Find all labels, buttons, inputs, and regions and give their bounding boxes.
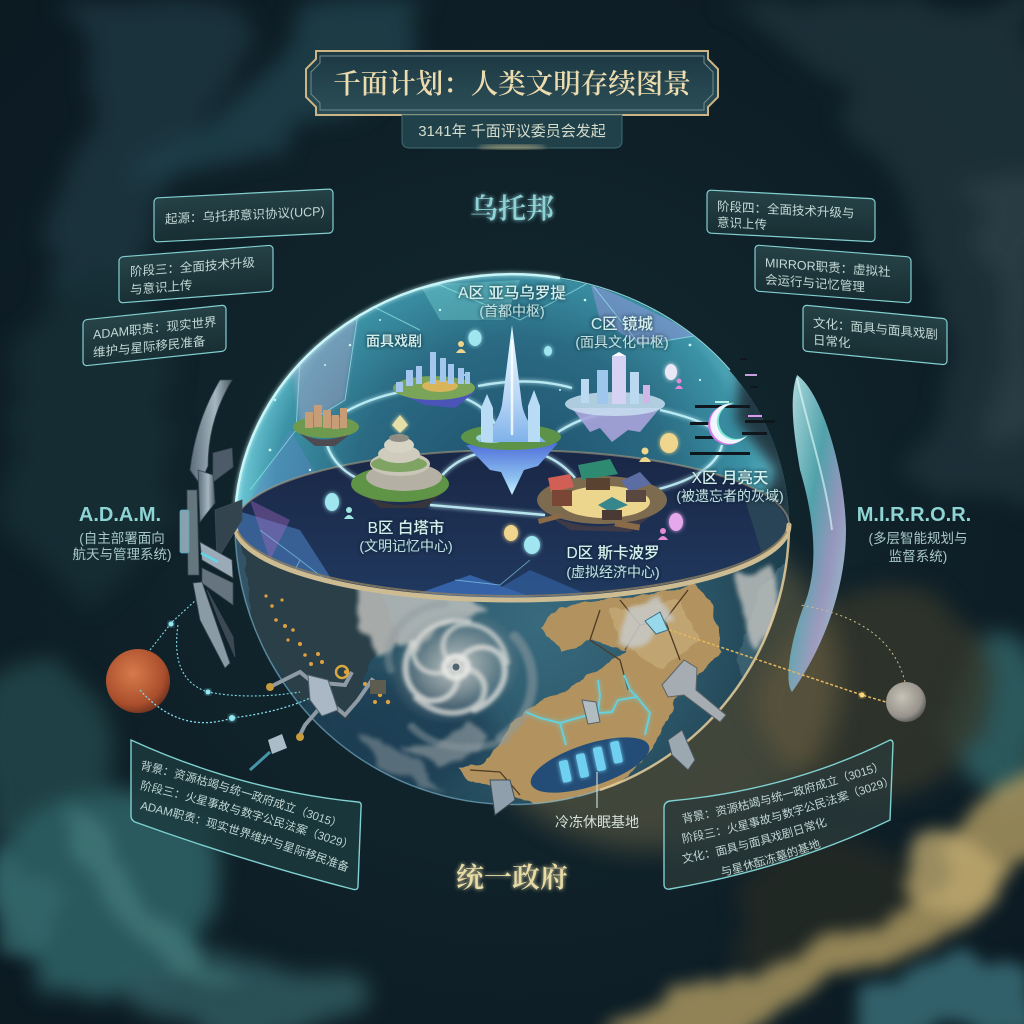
orbits and beams bbox=[140, 600, 905, 723]
mech: surface cannons bbox=[490, 612, 726, 815]
panel: phase three: 阶段三：全面技术升级 bbox=[130, 255, 255, 279]
island: central spire A bbox=[461, 325, 561, 495]
continent: cracked desert bbox=[460, 560, 789, 806]
panel: MIRROR duty bbox=[755, 245, 911, 303]
panel: MIRROR duty: MIRROR职责：虚拟社 bbox=[765, 255, 891, 279]
panel: phase four: 意识上传 bbox=[717, 215, 767, 232]
planet: Moon bbox=[886, 682, 926, 722]
label: zone C bbox=[575, 314, 669, 350]
label: zone A: (首都中枢) bbox=[479, 303, 545, 319]
network links bbox=[327, 381, 722, 515]
device: M.I.R.R.O.R. blade bbox=[788, 375, 846, 692]
panel: ADAM duty: ADAM职责：现实世界 bbox=[93, 315, 217, 342]
panel: MIRROR duty: 会运行与记忆管理 bbox=[765, 272, 865, 294]
label: zone X: (被遗忘者的灰域) bbox=[676, 488, 784, 504]
subtitle text: 3141年 千面评议委员会发起 bbox=[418, 123, 606, 140]
title text: 千面计划：人类文明存续图景 bbox=[333, 61, 691, 101]
rim: brass ring bbox=[235, 450, 789, 600]
label: M.I.R.R.O.R. bbox=[857, 504, 971, 564]
dark landmass upper left bbox=[240, 530, 400, 720]
label: zone C: C区 镜城 bbox=[591, 314, 653, 333]
floor: navy disc bbox=[235, 450, 789, 600]
island: D market bbox=[537, 459, 667, 532]
label: zone B: (文明记忆中心) bbox=[359, 538, 453, 554]
panel: lower right curved: 背景：资源枯竭与统一政府成立（3015） bbox=[682, 762, 876, 824]
cyan network bbox=[526, 675, 650, 745]
label: zone B: B区 白塔市 bbox=[368, 518, 444, 537]
clouds: white bands bbox=[355, 565, 782, 790]
planet: Mars bbox=[106, 649, 170, 713]
label: M.I.R.R.O.R.: (多层智能规划与 bbox=[868, 530, 968, 546]
island: C mirror city bbox=[565, 352, 665, 442]
panel: lower right curved: 阶段三：火星事故与数字公民法案（3029） bbox=[682, 777, 887, 844]
panel: phase four: 阶段四：全面技术升级与 bbox=[717, 199, 854, 221]
title plaque bbox=[306, 51, 718, 115]
label: A.D.A.M. bbox=[72, 504, 172, 562]
hurricane bbox=[383, 602, 539, 752]
panel: culture: 文化：面具与面具戏剧 bbox=[813, 316, 938, 342]
label: zone B bbox=[359, 518, 453, 554]
panel: lower left curved: ADAM职责：现实世界维护与星际移民准备 bbox=[140, 802, 348, 872]
panel: lower left curved: 阶段三：火星事故与数字公民法案（3029） bbox=[140, 780, 346, 848]
cryo pods recess bbox=[530, 737, 650, 793]
subtitle plaque bbox=[402, 115, 622, 149]
panel: phase four bbox=[707, 190, 875, 242]
label: mask drama: 面具戏剧 bbox=[366, 333, 422, 349]
island: left blocks bbox=[293, 405, 359, 446]
label: A.D.A.M.: A.D.A.M. bbox=[79, 504, 161, 526]
panel: lower right curved bbox=[663, 739, 894, 890]
label: zone D bbox=[566, 544, 660, 580]
label: M.I.R.R.O.R.: M.I.R.R.O.R. bbox=[857, 504, 971, 526]
dome labels bbox=[359, 284, 784, 580]
device: A.D.A.M. station bbox=[180, 380, 242, 668]
label: zone A bbox=[458, 284, 566, 319]
label: A.D.A.M.: (自主部署面向 bbox=[79, 531, 165, 546]
label: zone D: (虚拟经济中心) bbox=[566, 564, 660, 580]
dome: stars bbox=[269, 299, 701, 471]
panel: ADAM duty: 维护与星际移民准备 bbox=[93, 334, 206, 360]
island: top left city bbox=[393, 352, 475, 408]
heading: unified government: 统一政府 bbox=[456, 856, 568, 896]
label: A.D.A.M.: 航天与管理系统) bbox=[72, 547, 172, 562]
callout: cryo base: 冷冻休眠基地 bbox=[555, 814, 639, 830]
dark ocean shade lower left bbox=[338, 673, 500, 788]
panel: origin: 起源：乌托邦意识协议(UCP) bbox=[165, 203, 325, 226]
moon: X zone glitch crescent bbox=[690, 358, 775, 455]
sphere: lower earth hemisphere bbox=[235, 510, 840, 850]
city lights bbox=[264, 594, 390, 704]
dome: dark right side bbox=[724, 366, 789, 522]
label: zone A: A区 亚马乌罗提 bbox=[458, 284, 566, 302]
label: zone X bbox=[676, 469, 784, 504]
panel: lower right curved: 与星休酝冻墓的基地 bbox=[722, 838, 820, 876]
panel: lower left curved bbox=[130, 738, 362, 890]
panel: ADAM duty bbox=[83, 305, 226, 366]
label: zone D: D区 斯卡波罗 bbox=[566, 544, 660, 562]
panel: phase three bbox=[119, 245, 273, 303]
callout: cryo base bbox=[555, 772, 639, 830]
panel: culture bbox=[803, 305, 947, 365]
icons: masks and persons bbox=[325, 330, 683, 554]
label: M.I.R.R.O.R.: 监督系统) bbox=[889, 549, 947, 564]
label: zone X: X区 月亮天 bbox=[692, 469, 769, 487]
panel: culture: 日常化 bbox=[813, 333, 851, 351]
panel: lower right curved: 文化：面具与面具戏剧日常化 bbox=[682, 818, 827, 864]
panel: origin bbox=[154, 189, 333, 242]
dome: pastel facets bbox=[292, 318, 359, 422]
label: zone C: (面具文化中枢) bbox=[575, 334, 669, 350]
panel: phase three: 与意识上传 bbox=[130, 277, 192, 297]
island: white tower B bbox=[351, 415, 449, 508]
panel: lower left curved: 背景：资源枯竭与统一政府成立（3015） bbox=[142, 760, 335, 826]
mech: orbital arm station bbox=[250, 666, 386, 770]
dome: lattice bbox=[250, 284, 694, 490]
heading: utopia: 乌托邦 bbox=[470, 187, 554, 227]
sphere: upper dome bbox=[235, 270, 800, 600]
